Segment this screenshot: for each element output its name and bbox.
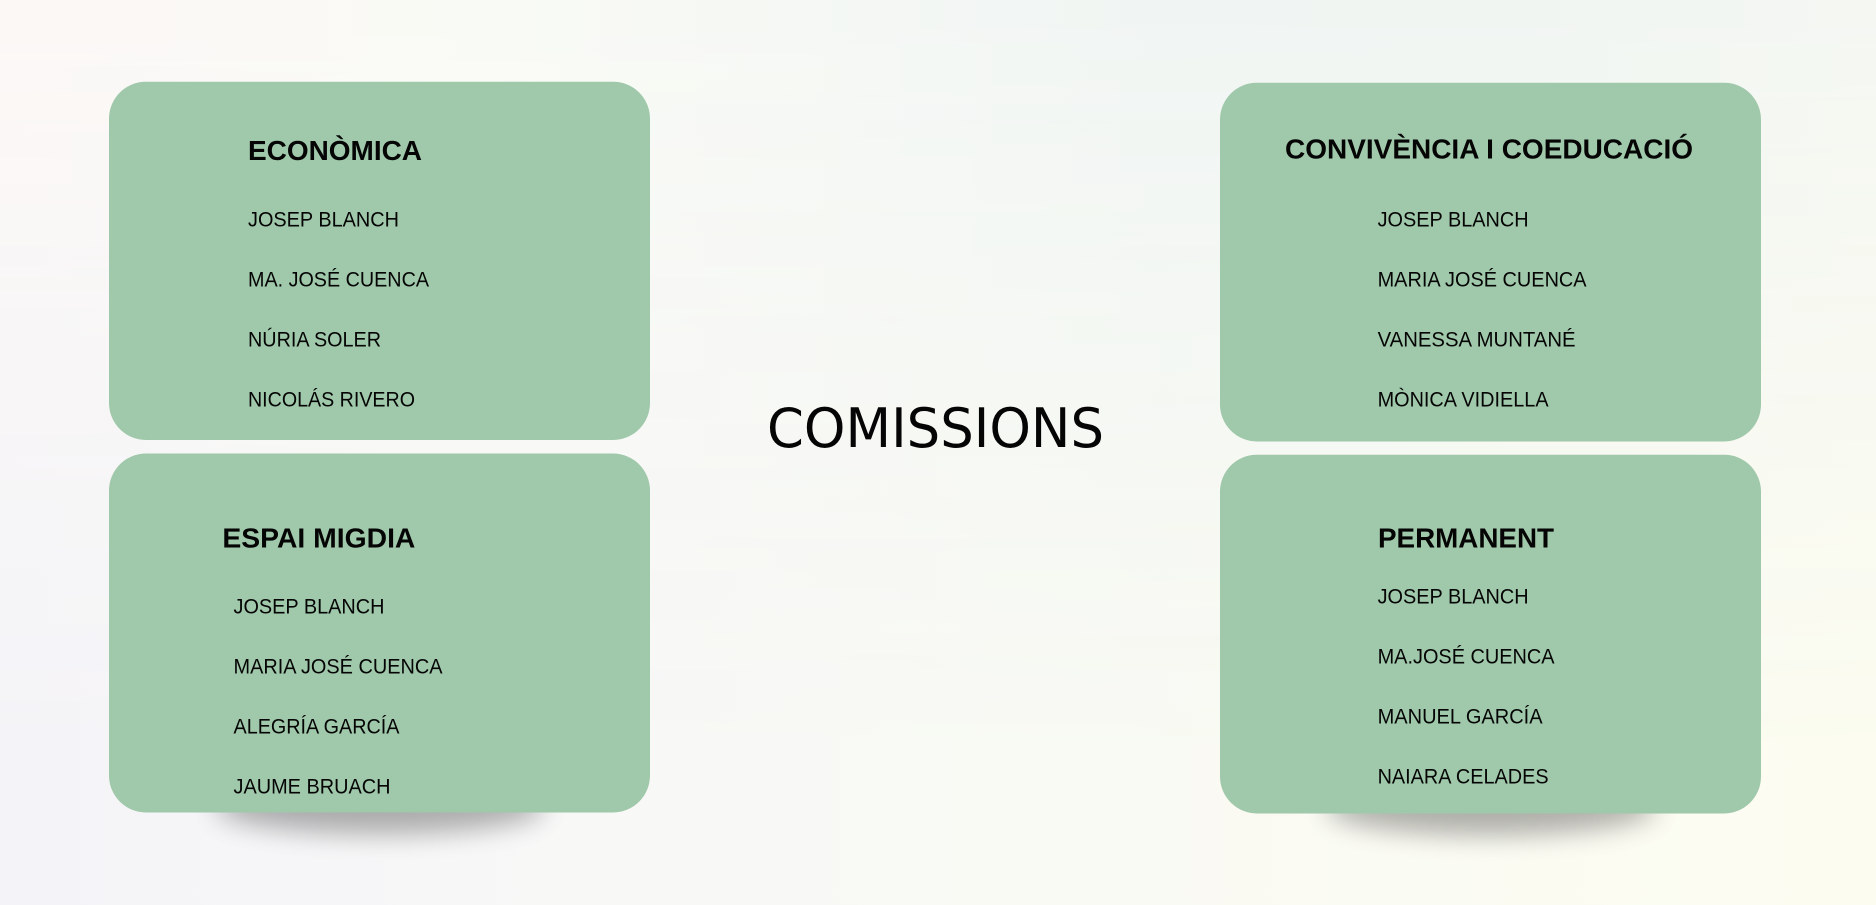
member names: permanent: MANUEL GARCÍA xyxy=(1378,705,1543,728)
member names: convivència i coeducació: VANESSA MUNTANÉ xyxy=(1378,329,1576,352)
member names: econòmica: NICOLÁS RIVERO xyxy=(248,389,415,412)
member names: espai migdia: JOSEP BLANCH xyxy=(234,595,384,618)
heading: econòmica: ECONÒMICA xyxy=(248,135,422,166)
member names: permanent: MA.JOSÉ CUENCA xyxy=(1378,645,1555,668)
heading: convivència i coeducació: CONVIVÈNCIA I COEDUCACIÓ xyxy=(1285,133,1693,164)
member names: convivència i coeducació: MARIA JOSÉ CUENCA xyxy=(1378,269,1587,292)
member names: convivència i coeducació xyxy=(1378,209,1587,412)
member names: permanent: JOSEP BLANCH xyxy=(1378,585,1529,608)
heading: permanent: PERMANENT xyxy=(1378,522,1554,553)
member names: convivència i coeducació: MÒNICA VIDIELLA xyxy=(1378,389,1549,412)
member names: econòmica: JOSEP BLANCH xyxy=(248,209,399,232)
shadow under espai migdia card xyxy=(215,778,545,834)
shadow under permanent card xyxy=(1326,779,1656,835)
member names: permanent xyxy=(1378,585,1555,788)
panel: permanent xyxy=(1220,455,1761,814)
panel: convivència i coeducació xyxy=(1220,83,1761,441)
member names: econòmica xyxy=(248,209,429,412)
member names: espai migdia: MARIA JOSÉ CUENCA xyxy=(234,655,443,678)
member names: permanent: NAIARA CELADES xyxy=(1378,765,1549,788)
member names: econòmica: MA. JOSÉ CUENCA xyxy=(248,269,429,292)
member names: econòmica: NÚRIA SOLER xyxy=(248,329,381,352)
member names: espai migdia: JAUME BRUACH xyxy=(234,775,390,798)
panel: espai migdia xyxy=(109,454,650,812)
heading: espai migdia: ESPAI MIGDIA xyxy=(222,522,416,553)
member names: convivència i coeducació: JOSEP BLANCH xyxy=(1378,209,1529,232)
member names: espai migdia: ALEGRÍA GARCÍA xyxy=(234,715,400,738)
member names: espai migdia xyxy=(234,595,443,798)
title: COMISSIONS xyxy=(767,397,1104,460)
panel: econòmica xyxy=(109,82,650,440)
